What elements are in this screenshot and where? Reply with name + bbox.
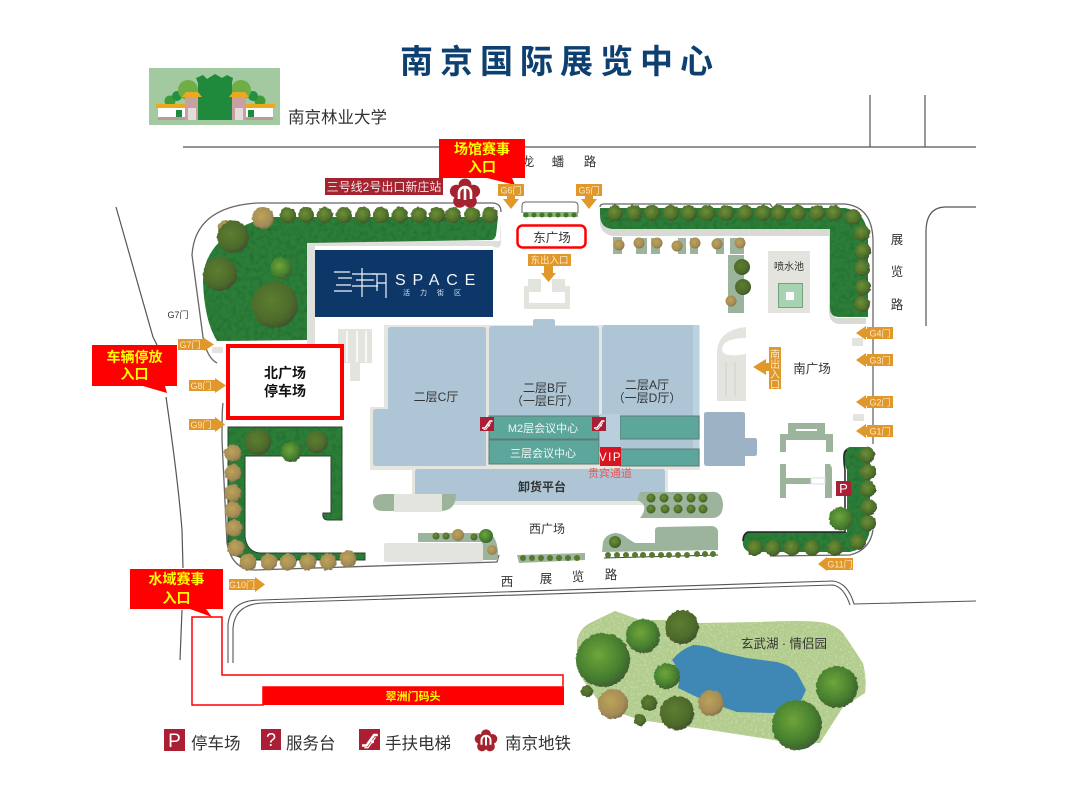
loading platform [415,469,665,501]
south exit marker: 南 [770,348,780,361]
callout: water event entrance: 入口 [162,590,190,606]
north plaza parking box [228,346,342,418]
VIP corridor [588,414,632,480]
gate label: G1 [856,424,893,438]
text: 展览路 [891,233,904,312]
legend: parking: P [168,731,181,752]
green belt: south-west U-shape with trees [224,427,365,570]
M2 conference centre [489,416,599,439]
lake garden [576,610,866,750]
east exit entrance marker [524,254,571,309]
icon: parking on map: P [839,481,848,496]
callout: water event entrance: 水域赛事 [148,571,204,587]
hall A: 二层A厅 [625,378,669,392]
hall B: 二层B厅 [523,381,567,395]
VIP corridor: 贵宾通道 [588,466,632,480]
legend: escalator [359,729,451,753]
south road: double line with bend [228,581,976,663]
gate label: G8: G8门 [190,380,212,391]
gate label: G4: G4门 [869,328,891,338]
text: 龙蟠路 [522,154,597,169]
navy panel: SPACE activity district: SPACE [395,272,482,289]
fountain [768,251,810,313]
south exit marker: 出 [770,358,780,371]
hall A [602,325,699,466]
text: 西展览路: 览 [572,569,584,584]
gate label: G10 [229,577,265,592]
small service blocks near gates [212,338,864,421]
callout: venue event entrance: 入口 [468,159,496,175]
small eastern building [704,412,757,466]
callout: venue event entrance [439,139,525,185]
text: 西展览路: 展 [540,572,552,586]
text: 西展览路: 路 [605,567,618,582]
third floor conference centre [489,440,599,464]
legend: service desk: ? [266,730,276,750]
gate label: G6: G6门 [500,184,522,196]
fountain: 喷水池 [774,260,804,273]
gate label: G10: G10门 [229,579,255,590]
east exit entrance marker: 东出入口 [530,254,569,266]
text: 展览路: 路 [891,297,904,312]
legend: parking: 停车场 [191,734,240,753]
callout: vehicle parking entrance: 入口 [120,366,148,382]
western road: left-hand line [116,207,183,660]
text: 展览路: 览 [891,264,903,279]
hall B: （一层E厅） [511,394,579,408]
gate label: G8 [189,378,226,393]
VIP corridor: VIP [599,452,622,464]
callout: water event entrance [130,569,223,617]
icon: Nanjing Forestry University gate [149,68,280,125]
gate label: G1: G1门 [869,426,891,436]
gate label: G3 [856,353,893,367]
subway label: 三号线2号出口新庄站 [327,179,441,194]
text: 西展览路: 西 [501,575,513,589]
west landscaping: tree block right of platform [637,492,723,518]
west landscaping: small island [517,553,585,563]
loading platform: 卸货平台 [518,479,566,494]
icon: parking on map [836,481,851,496]
gate label: G2 [856,395,893,409]
gate label: G6 [498,184,524,209]
west landscaping: near loading platform [373,494,456,512]
water route to pier: 翠洲门码头 [386,689,440,703]
green island at east plaza [522,202,578,218]
legend: service desk [261,729,336,753]
north plaza parking box: 北广场 [264,365,306,381]
south exit ramp building [717,327,746,401]
legend: parking [164,729,240,753]
south-east landscaped blocks [780,423,833,498]
callout: vehicle parking entrance: 车辆停放 [106,349,162,365]
third floor conference centre: 三层会议中心 [510,447,576,460]
hall C [373,327,486,466]
east plaza label: 东广场 [533,231,571,245]
exhibition halls block [370,319,700,505]
gate label: G11: G11门 [827,558,853,570]
text: 西展览路 [501,567,618,589]
venue outer boundary lines [192,203,873,570]
gate label: G7: G7门 [179,339,201,350]
pond [672,645,806,713]
trees: northwest belt [203,207,498,328]
north plaza parking box: 停车场 [264,383,306,399]
water route to pier [192,617,564,705]
gate label: G5 [576,184,602,209]
green belt: southeast corner with trees [743,447,877,556]
gate label: G7: G7门 [167,309,189,320]
text: 南广场: 南广场 [793,361,831,376]
gate label: G2: G2门 [869,396,891,408]
icon: metro on map [450,178,480,208]
green belt: northwest corner [203,217,501,345]
callout: venue event entrance: 场馆赛事 [454,141,510,157]
gray ramp beside north plaza [338,329,372,381]
south exit marker: 口 [770,380,780,391]
hall A: （一层D厅） [613,391,681,405]
navy panel: SPACE activity district [315,250,493,317]
gate label: G11 [818,557,853,571]
hall C: 二层C厅 [414,390,458,404]
callout: vehicle parking entrance [92,345,177,393]
M2 conference centre: M2层会议中心 [508,422,578,435]
text: 龙蟠路: 路 [584,154,597,169]
hall A teal strips [620,416,699,466]
text: 南京林业大学: 南京林业大学 [288,108,387,127]
text: 西广场: 西广场 [529,522,565,536]
east plaza label [518,226,586,248]
roads: northern and eastern road lines [183,95,976,326]
navy panel: SPACE activity district: 活力街区 [403,288,471,297]
west landscaping: long planted block [602,526,718,558]
gate label: G9: G9门 [190,419,212,430]
south exit marker: 入 [770,370,780,381]
south exit marker [753,347,781,391]
legend: metro [475,729,571,753]
lake garden: 玄武湖 · 情侣园 [741,636,827,651]
text: 龙蟠路: 蟠 [552,155,565,169]
text: 龙蟠路: 龙 [522,155,534,169]
planting row below east belt [613,237,751,313]
title: 南京国际展览中心 [400,43,720,80]
text: 展览路: 展 [891,233,903,247]
hall B [489,326,599,416]
green belt: east side with trees [600,205,871,324]
legend: metro: 南京地铁 [505,734,571,753]
icon: escalators on map [480,417,606,431]
gate label: G3: G3门 [869,354,891,366]
legend: service desk: 服务台 [286,734,336,753]
gate label: G4 [856,326,893,340]
legend: escalator: 手扶电梯 [385,734,451,753]
gate label: G5: G5门 [578,184,600,196]
west landscaping: left planted block [384,529,498,562]
legend [164,729,571,753]
lake trees [576,610,858,750]
gate label: G7 [167,309,214,351]
gate label: G9 [189,417,225,432]
